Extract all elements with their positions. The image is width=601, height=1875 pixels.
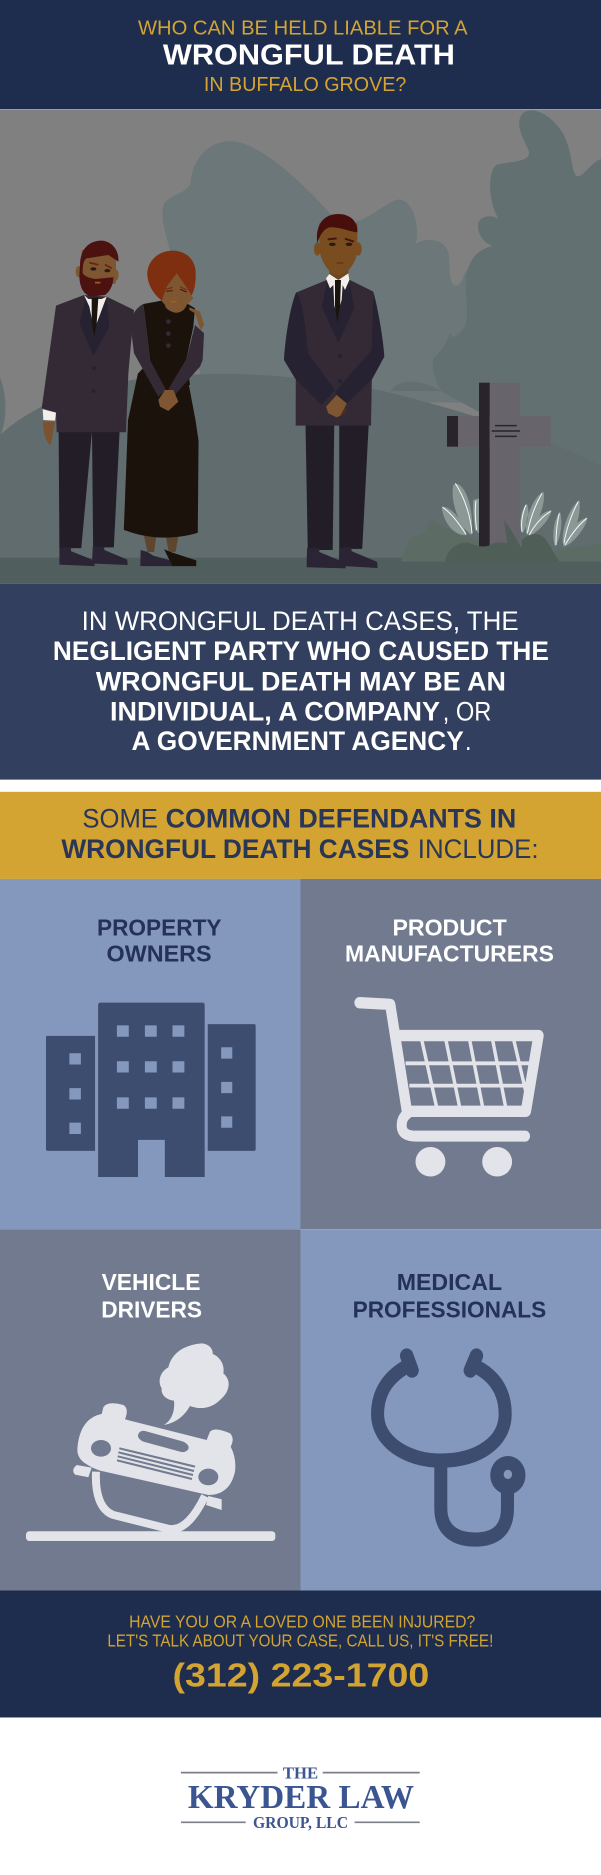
panel: vehicle drivers [0,1229,301,1590]
hill [0,374,601,584]
subheading text: WRONGFUL DEATH CASES [61,835,409,864]
background tree right [391,110,601,479]
label: property owners: OWNERS [107,941,212,967]
dress skirt [124,373,199,538]
shirt [326,273,349,313]
hair and beard [79,241,118,297]
shoes [140,550,175,566]
dress buttons [166,319,171,324]
panel: property owners [0,879,301,1229]
jacket [42,295,134,432]
ground [0,558,601,584]
statement text: IN WRONGFUL DEATH CASES, THE [82,607,519,636]
statement text [53,607,549,756]
call to action text: LET'S TALK ABOUT YOUR CASE, CALL US, IT'S FREE! [107,1631,493,1651]
icon: overturned car with smoke [26,1343,275,1541]
label: product manufacturers: PRODUCT [392,914,507,941]
label: vehicle drivers: DRIVERS [101,1296,202,1323]
shirt [84,295,107,327]
trousers [305,424,369,550]
face [162,273,193,313]
subheading text [61,805,539,864]
statement text: NEGLIGENT PARTY WHO CAUSED THE [53,637,549,666]
tie [92,298,98,337]
label: property owners [97,914,222,967]
panel: product manufacturers [301,879,601,1229]
arms [284,292,384,407]
road [26,1531,275,1541]
panel: medical professionals [301,1229,601,1590]
logo: the kryder law group: KRYDER LAW [188,1778,414,1815]
ears and face [314,242,321,256]
windshield [138,1431,189,1452]
hand [43,422,55,445]
sleeves [131,304,204,397]
logo: the kryder law group [181,1765,420,1832]
jacket buttons [92,366,96,370]
label: medical professionals: PROFESSIONALS [353,1296,546,1323]
lapels [79,300,109,356]
phone number: (312) 223-1700 [172,1656,429,1694]
illustration: mourners at a grave [0,109,601,584]
cuff [43,409,56,421]
neck [329,268,348,282]
clasped hands [326,395,347,417]
smoke [160,1343,229,1425]
lapels [322,283,354,343]
car lights [91,1440,111,1457]
jacket [296,280,373,426]
call to action banner [0,1590,601,1717]
ears and face [76,266,82,277]
shoes [307,547,378,568]
statement text: , OR [443,697,491,727]
stone cross [447,383,551,547]
jacket buttons [338,354,342,358]
standing man [284,214,384,568]
logo: the kryder law group: THE [283,1765,318,1783]
left edge foliage [0,378,5,437]
plants behind cross [402,483,601,562]
label: medical professionals: MEDICAL [397,1269,502,1295]
bodice [138,300,195,385]
icon: shopping cart [360,1003,539,1177]
header banner [0,0,601,109]
title line: who can be held liable: WHO CAN BE HELD LIABLE FOR A [138,17,468,39]
hair [317,214,357,243]
label: vehicle drivers [101,1269,202,1323]
subheading text: COMMON DEFENDANTS IN [166,805,516,834]
statement text: A GOVERNMENT AGENCY [131,727,464,756]
gravestone cross with plants [402,383,601,562]
roof [96,1472,205,1529]
label: product manufacturers: MANUFACTURERS [345,941,554,967]
shoes [59,547,128,566]
statement text: . [465,727,472,756]
call to action text: HAVE YOU OR A LOVED ONE BEEN INJURED? [129,1612,475,1631]
statement text: WRONGFUL DEATH MAY BE AN [96,667,506,697]
upper body [131,251,204,411]
clasped hands [158,390,178,411]
subheading text: SOME [82,805,158,834]
icon: stethoscope [378,1356,526,1540]
upper body [42,241,134,432]
legs [144,535,179,552]
trousers [59,431,120,548]
label: product manufacturers [345,914,554,967]
title line: wrongful death: WRONGFUL DEATH [163,39,455,71]
grille [117,1448,195,1479]
title line: in buffalo grove: IN BUFFALO GROVE? [204,74,406,96]
hand on shoulder [189,307,204,330]
icon: buildings [46,1003,256,1177]
label: medical professionals [353,1269,546,1323]
logo: the kryder law group: GROUP, LLC [253,1815,348,1832]
statement panel [0,584,601,780]
subheading text: INCLUDE: [418,835,539,864]
call to action text [107,1612,493,1651]
woman in black dress [124,251,204,566]
bumpers [73,1465,222,1510]
label: vehicle drivers: VEHICLE [102,1269,200,1295]
gold subheading band [0,792,601,879]
tie [335,280,341,323]
background tree left [162,141,470,402]
statement text: INDIVIDUAL, A COMPANY [110,697,440,727]
label: property owners: PROPERTY [97,914,222,941]
hair [147,251,196,302]
upper body [284,214,384,426]
bush in front [445,521,559,562]
man with beard [42,241,134,566]
car body [77,1403,235,1495]
